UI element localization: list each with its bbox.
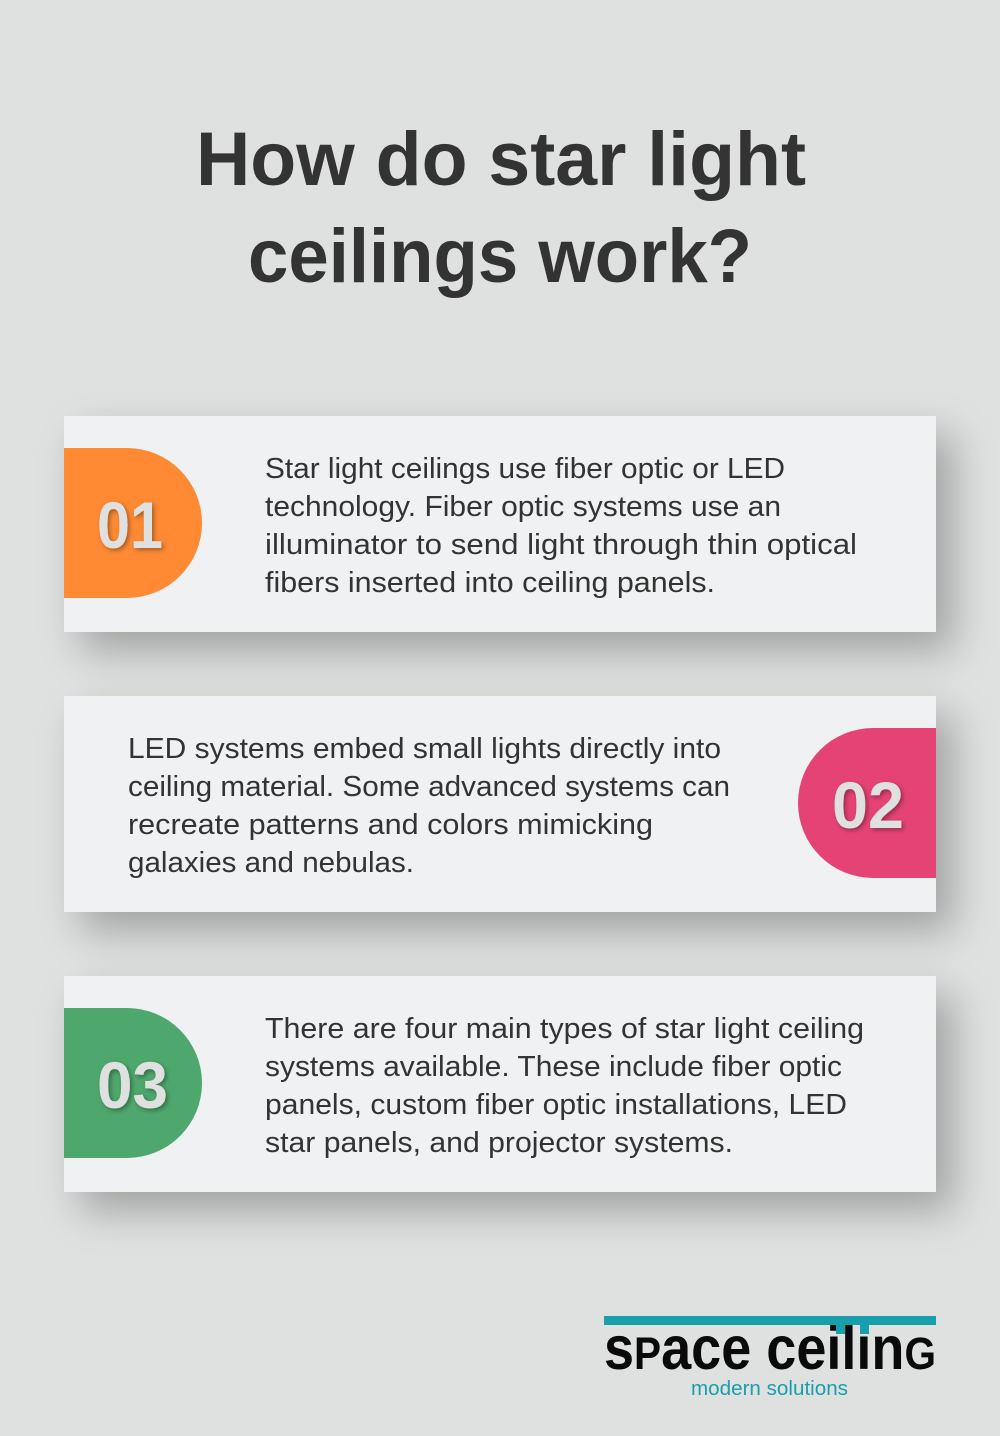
text block: step 3: systems available. These include fiber optic xyxy=(265,1051,842,1083)
title: ceilings work? xyxy=(248,214,752,299)
panel: step 3 card xyxy=(64,976,936,1192)
text block: step 1: Star light ceilings use fiber optic or LED xyxy=(265,453,785,485)
text block: step 1: illuminator to send light through thin optical xyxy=(265,529,857,561)
badge: 02 xyxy=(798,728,936,878)
text block: step 3: panels, custom fiber optic installations, LED xyxy=(265,1089,847,1121)
text block: step 3 xyxy=(265,1013,864,1159)
badge: 03 xyxy=(64,1008,202,1158)
logo: Space Ceiling: modern solutions xyxy=(691,1378,848,1400)
text block: step 2: galaxies and nebulas. xyxy=(128,847,414,879)
panel: step 2 card xyxy=(64,696,936,912)
title xyxy=(196,117,806,299)
text block: step 1 xyxy=(265,453,857,599)
text block: step 2: recreate patterns and colors mimicking xyxy=(128,809,653,841)
text block: step 1: fibers inserted into ceiling panels. xyxy=(265,567,715,599)
text block: step 3: There are four main types of star light ceiling xyxy=(265,1013,864,1045)
text block: step 2 xyxy=(128,733,730,879)
badge: 01: 01 xyxy=(97,488,163,562)
badge: 01 xyxy=(64,448,202,598)
badge: 02: 02 xyxy=(832,768,904,842)
text block: step 2: ceiling material. Some advanced systems can xyxy=(128,771,730,803)
text block: step 2: LED systems embed small lights directly into xyxy=(128,733,721,765)
title: How do star light xyxy=(196,117,806,202)
badge: 03: 03 xyxy=(97,1048,168,1122)
text block: step 1: technology. Fiber optic systems use an xyxy=(265,491,781,523)
text block: step 3: star panels, and projector systems. xyxy=(265,1127,733,1159)
panel: step 1 card xyxy=(64,416,936,632)
logo: Space Ceiling: sPace ceilinG xyxy=(604,1314,936,1382)
